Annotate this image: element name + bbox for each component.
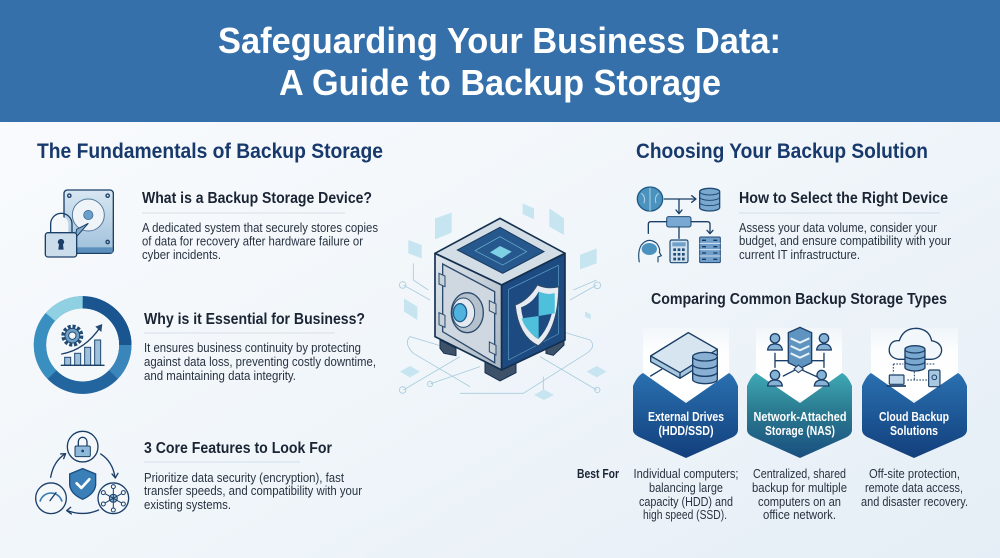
text: best for NAS: computers on an <box>758 494 841 509</box>
dial <box>451 293 483 333</box>
title <box>218 20 781 103</box>
label: external drives: (HDD/SSD) <box>658 424 714 438</box>
icon: core features cycle <box>36 431 129 514</box>
block: core features: 3 Core Features to Look For <box>144 440 332 457</box>
block: what is a backup storage device: What is a Backup Storage Device? <box>142 190 372 207</box>
block: why is it essential: against data loss, preventing costly downtime, <box>144 354 376 369</box>
heading: comparing: Comparing Common Backup Storage Types <box>651 291 947 308</box>
block: what is a backup storage device: of data for recovery after hardware failure or <box>142 234 364 248</box>
block: what is a backup storage device: cyber incidents. <box>142 247 221 262</box>
text: best for cloud: and disaster recovery. <box>861 494 968 509</box>
block: what is a backup storage device: A dedicated system that securely stores copies <box>142 220 378 235</box>
label: cloud backup: Solutions <box>890 424 938 438</box>
block: why is it essential: It ensures business continuity by protecting <box>144 340 361 355</box>
heading: choosing: Choosing Your Backup Solution <box>636 140 928 163</box>
text: best for NAS <box>752 466 847 522</box>
text: best for external drives: high speed (SSD). <box>643 507 727 522</box>
label: best for: Best For <box>577 466 619 481</box>
text: best for external drives: balancing large <box>649 480 723 495</box>
block: core features <box>144 440 363 512</box>
illustration: secure vault <box>399 203 607 400</box>
floating documents <box>400 203 607 400</box>
card: NAS <box>747 327 852 458</box>
safe top <box>435 218 565 285</box>
header banner <box>0 0 1000 122</box>
icon: selection flow <box>637 187 720 263</box>
card: cloud backup <box>862 328 967 458</box>
text: best for cloud: remote data access, <box>865 480 963 495</box>
circuit lines <box>399 263 601 393</box>
block: core features: existing systems. <box>144 497 231 512</box>
text: best for external drives: Individual computers; <box>634 466 738 481</box>
text: best for NAS: backup for multiple <box>752 480 847 495</box>
block: how to select: budget, and ensure compatibility with your <box>739 233 952 248</box>
block: why is it essential: and maintaining data integrity. <box>144 368 296 383</box>
label: NAS: Network-Attached <box>754 410 846 424</box>
safe top screen <box>457 227 544 273</box>
block: why is it essential: Why is it Essential for Business? <box>144 311 365 328</box>
label: external drives: External Drives <box>648 410 724 424</box>
icon: cloud backup <box>887 328 942 387</box>
title: A Guide to Backup Storage <box>279 62 721 103</box>
label: NAS <box>754 410 846 438</box>
block: core features: transfer speeds, and compatibility with your <box>144 483 363 498</box>
text: best for external drives <box>634 466 738 522</box>
icon: donut with growth chart <box>40 302 125 388</box>
feet <box>440 338 564 381</box>
title: Safeguarding Your Business Data: <box>218 20 781 61</box>
block: how to select <box>739 190 952 262</box>
text: best for NAS: Centralized, shared <box>753 466 846 481</box>
safe right face <box>502 253 565 370</box>
block: why is it essential <box>144 311 376 383</box>
label: cloud backup <box>879 410 949 438</box>
panel: fundamentals <box>36 140 383 514</box>
heading: fundamentals: The Fundamentals of Backup Storage <box>37 140 383 163</box>
block: how to select: Assess your data volume, consider your <box>739 220 938 235</box>
safe left face <box>435 253 502 370</box>
icon: locked hard drive <box>45 190 113 257</box>
text: best for cloud: Off-site protection, <box>869 466 960 481</box>
text: best for external drives: capacity (HDD) and <box>639 494 733 509</box>
text: best for NAS: office network. <box>763 507 836 522</box>
block: how to select: current IT infrastructure. <box>739 247 860 262</box>
card: external drives <box>633 328 738 458</box>
block: core features: Prioritize data security (encryption), fast <box>144 470 344 485</box>
block: what is a backup storage device <box>142 190 378 262</box>
panel: choosing solution <box>577 140 968 522</box>
text: best for cloud <box>861 466 968 509</box>
safe door <box>443 264 495 363</box>
label: cloud backup: Cloud Backup <box>879 410 949 424</box>
label: NAS: Storage (NAS) <box>765 424 835 438</box>
shield <box>515 285 559 346</box>
label: external drives <box>648 410 724 438</box>
icon: NAS network <box>768 327 831 386</box>
icon: external drive <box>651 333 717 384</box>
block: how to select: How to Select the Right Device <box>739 190 948 207</box>
